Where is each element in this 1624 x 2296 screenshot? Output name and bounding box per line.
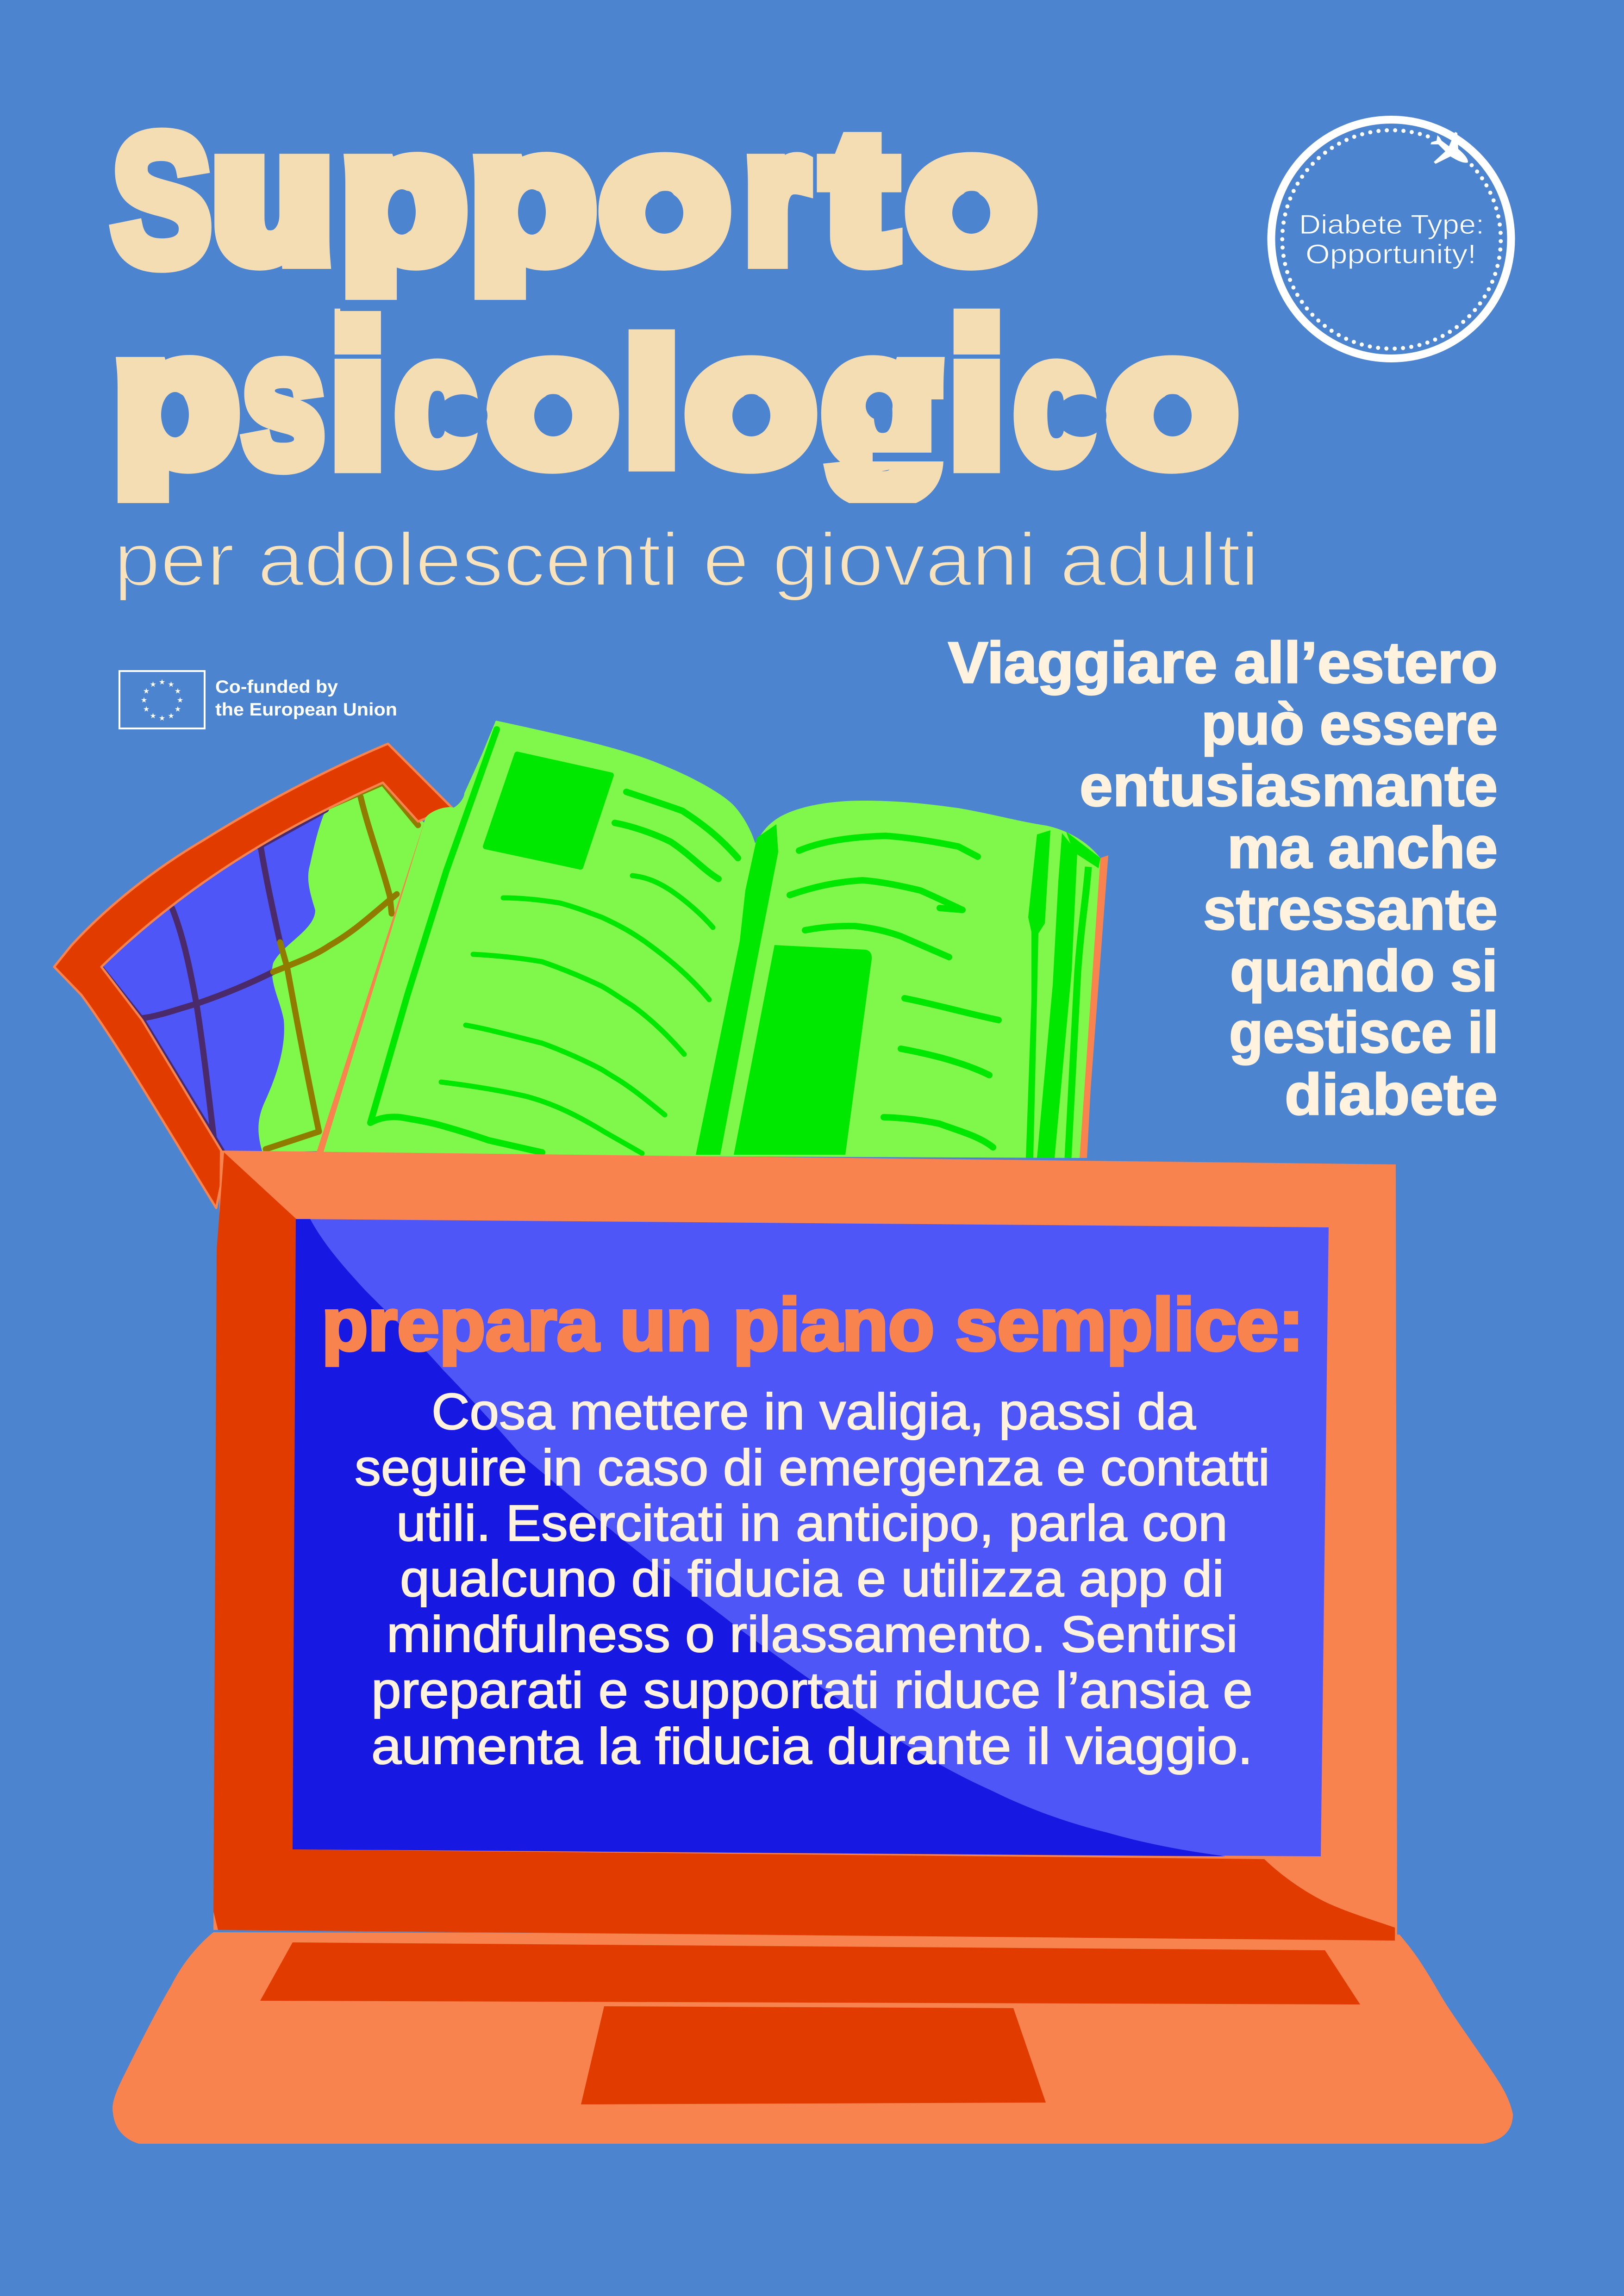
EU flag stars: ★	[168, 711, 175, 720]
title: g	[825, 302, 945, 499]
badge text	[1299, 210, 1484, 269]
panel body text: seguire in caso di emergenza e contatti	[355, 1439, 1270, 1496]
EU flag stars: ★	[168, 680, 175, 689]
panel body text: mindfulness o rilassamento. Sentirsi	[387, 1606, 1238, 1663]
subtitle: per adolescenti e giovani adulti	[114, 517, 1259, 602]
map grid lines on water	[101, 809, 326, 1151]
intro text: Viaggiare all’estero	[948, 630, 1498, 695]
intro text: può essere	[1201, 691, 1498, 757]
book cover edge right	[1076, 855, 1108, 1158]
EU flag stars: ★	[159, 714, 165, 722]
intro text: quando si	[1230, 938, 1498, 1003]
lid shaded frame	[213, 1152, 1395, 1941]
EU flag stars: ★	[150, 680, 156, 689]
illustration: map	[54, 744, 452, 1208]
badge dotted ring	[1282, 130, 1501, 348]
intro text: diabete	[1285, 1062, 1498, 1127]
map grid lines on land	[266, 783, 418, 1149]
intro text: gestisce il	[1229, 1000, 1499, 1065]
screen shadow	[293, 1219, 1225, 1856]
title: u	[215, 99, 331, 295]
title: t	[827, 99, 893, 295]
badge text: Diabete Type:	[1299, 210, 1484, 240]
illustration: laptop lid	[213, 1151, 1397, 1941]
panel body text: Cosa mettere in valigia, passi da	[431, 1383, 1196, 1440]
title: o	[603, 99, 726, 295]
title: o	[491, 302, 614, 498]
EU co-funding logo	[119, 671, 397, 728]
screen	[293, 1219, 1329, 1856]
EU flag outline	[119, 671, 205, 728]
title: r	[747, 99, 806, 295]
book spine band	[696, 824, 778, 1155]
title: i	[333, 286, 382, 502]
EU text: Co-funded by	[215, 677, 338, 697]
EU flag stars: ★	[159, 678, 165, 686]
title: p	[473, 99, 593, 296]
map land	[258, 783, 444, 1152]
illustration: laptop base	[112, 1932, 1513, 2144]
book pages	[323, 721, 1100, 1158]
title: p	[344, 99, 463, 296]
book page edge streaks	[1026, 830, 1100, 1158]
EU text	[215, 677, 397, 720]
title: s	[242, 294, 325, 506]
lid light frame	[213, 1151, 1397, 1941]
icon: airplane	[1430, 132, 1468, 164]
EU flag stars: ★	[141, 696, 147, 704]
panel body text: utili. Esercitati in anticipo, parla con	[396, 1495, 1228, 1552]
map sheet	[101, 783, 431, 1185]
panel body text: aumenta la fiducia durante il viaggio.	[371, 1718, 1253, 1775]
title: o	[1111, 302, 1234, 498]
title: i	[952, 286, 1001, 502]
intro text	[948, 630, 1499, 1127]
panel body text	[355, 1383, 1270, 1775]
title: o	[910, 99, 1033, 295]
EU flag stars: ★	[150, 711, 156, 720]
title: S	[112, 96, 212, 303]
book cover edge left	[316, 818, 436, 1155]
laptop touchpad	[581, 2006, 1046, 2104]
title: o	[689, 302, 812, 498]
EU flag stars	[141, 678, 183, 722]
title: p	[116, 302, 236, 499]
badge ring	[1271, 119, 1511, 358]
EU flag stars: ★	[143, 687, 150, 695]
laptop keyboard	[260, 1942, 1360, 2004]
intro text: entusiasmante	[1080, 753, 1498, 818]
intro text: ma anche	[1227, 815, 1498, 880]
panel body text: preparati e supportati riduce l’ansia e	[371, 1662, 1253, 1719]
EU flag stars: ★	[175, 704, 181, 714]
intro text: stressante	[1203, 877, 1498, 942]
book image block right	[734, 945, 872, 1155]
badge: Diabete Type Opportunity	[1271, 119, 1511, 358]
EU flag stars: ★	[143, 704, 150, 714]
map frame	[54, 744, 452, 1208]
title	[111, 96, 1234, 514]
EU flag stars: ★	[177, 696, 183, 704]
illustration: open book	[316, 721, 1108, 1158]
EU flag stars: ★	[175, 687, 181, 695]
book text lines	[370, 729, 999, 1153]
panel heading: prepara un piano semplice:	[322, 1283, 1304, 1366]
panel body text: qualcuno di fiducia e utilizza app di	[400, 1550, 1224, 1607]
EU text: the European Union	[215, 700, 397, 720]
title: c	[1014, 302, 1095, 498]
laptop base body	[112, 1932, 1513, 2144]
badge text: Opportunity!	[1305, 239, 1476, 269]
title: c	[395, 302, 476, 498]
title: l	[627, 310, 676, 497]
book image block left	[486, 754, 611, 867]
